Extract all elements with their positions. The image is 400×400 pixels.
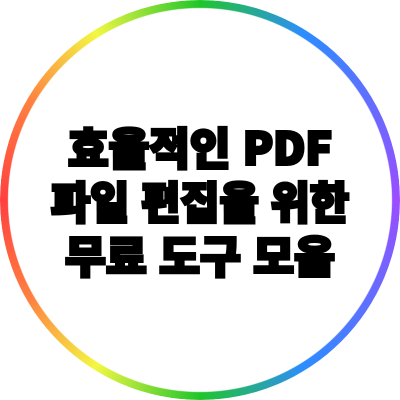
title line 3: 무료 도구 모음 bbox=[65, 222, 335, 286]
title line 2: 파일 편집을 위한 bbox=[51, 168, 349, 232]
title line 1: 효율적인 PDF bbox=[68, 114, 332, 178]
